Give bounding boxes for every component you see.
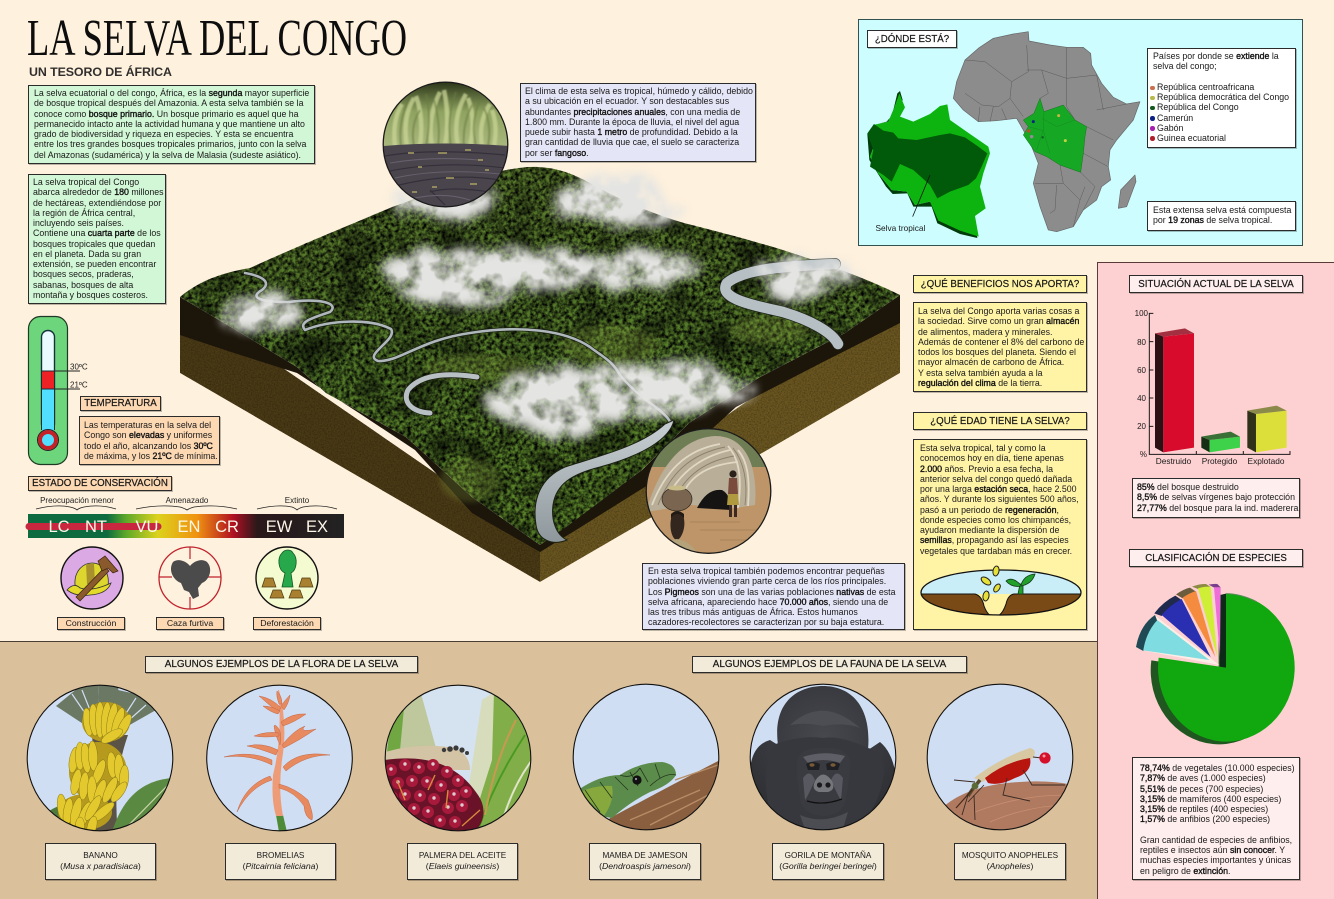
climate text: abundantes precipitaciones anuales, con una media de: [525, 106, 740, 116]
left soil side: [180, 297, 540, 582]
climate text: 1.800 mm. Durante la época de lluvia, el nivel del agua: [525, 117, 739, 127]
climate text: [520, 83, 756, 162]
map: enlarged rainforest region: [867, 91, 990, 238]
age panel with seed illustration: conocemos hoy en día, tiene apenas: [920, 453, 1064, 463]
caption: gorilla: GORILA DE MONTAÑA: [785, 851, 871, 860]
situation stats: [1132, 478, 1300, 518]
age panel with seed illustration: anterior selva del congo quedó dañada: [920, 474, 1072, 484]
species stats: Gran cantidad de especies de anfibios,: [1140, 835, 1292, 845]
extension text: bosques secos, praderas,: [33, 269, 134, 279]
bar chart: forest situation: 40: [1137, 394, 1147, 403]
caption: gorilla: [772, 843, 884, 880]
pygmy text: En esta selva tropical también podemos encontrar pequeñas: [648, 566, 885, 576]
river: widening lower reach: [535, 420, 674, 542]
caption: oil palm: PALMERA DEL ACEITE: [419, 851, 506, 860]
countries legend: Camerún: [1157, 112, 1193, 122]
heading: current situation: [1129, 275, 1303, 293]
age panel with seed illustration: [913, 439, 1087, 630]
conservation status bar: EW: [266, 518, 293, 536]
circle: muddy soil: [383, 82, 509, 210]
label: deforestation: Deforestación: [260, 618, 314, 628]
heading: temperature: [80, 396, 161, 411]
zones text: Esta extensa selva está compuesta: [1153, 205, 1291, 215]
benefits text: regulación del clima de la tierra.: [918, 378, 1042, 388]
countries legend: República centroafricana: [1157, 82, 1254, 92]
extension text: montaña y bosques costeros.: [33, 290, 148, 300]
heading: age: [913, 412, 1087, 430]
bar chart: forest situation: Protegido: [1202, 456, 1238, 466]
intro text: entre los tres grandes bosques tropicales primarios, junto con la selva: [34, 139, 306, 149]
climate text: El clima de esta selva es tropical, húmedo y cálido, debido: [525, 86, 753, 96]
age panel with seed illustration: por una larga estación seca, hace 2.500: [920, 484, 1077, 494]
climate text: por ser fangoso.: [525, 148, 589, 158]
countries legend: Guinea ecuatorial: [1157, 133, 1226, 143]
conservation scale labels: [36, 496, 337, 510]
age panel with seed illustration: Esta selva tropical, tal y como la: [920, 443, 1046, 453]
heading: temperature: TEMPERATURA: [84, 398, 157, 409]
caption: bromelia: (Pitcairnia feliciana): [243, 861, 318, 871]
species stats: 7,87% de aves (1.000 especies): [1140, 773, 1266, 783]
heading: current situation: SITUACIÓN ACTUAL DE LA SELVA: [1138, 279, 1294, 290]
age panel with seed illustration: vegetales que tardaban más en crecer.: [920, 546, 1072, 556]
bar chart: forest situation: 20: [1137, 422, 1147, 431]
caption: banana: (Musa x paradisiaca): [60, 861, 141, 871]
heading: where is it: ¿DÓNDE ESTÁ?: [875, 34, 949, 45]
caption: oil palm: (Elaeis guineensis): [426, 861, 499, 871]
heading: conservation: [28, 476, 172, 491]
heading: species classification: CLASIFICACIÓN DE ESPECIES: [1145, 553, 1287, 564]
flora: bromelia: [206, 685, 353, 832]
extension text: la región de África central,: [33, 208, 135, 218]
species stats: 3,15% de mamíferos (400 especies): [1140, 794, 1281, 804]
fauna: anopheles mosquito: [927, 684, 1074, 832]
benefits text: la sociedad. Sirve como un gran almacén: [918, 316, 1079, 326]
title: LA SELVA DEL CONGO: [27, 10, 407, 67]
lighter forest patches: [425, 316, 810, 502]
label: poaching: Caza furtiva: [167, 618, 213, 628]
extension text: abarca alrededor de 180 millones: [33, 187, 164, 197]
heading: fauna: [692, 656, 967, 673]
extension text: La selva tropical del Congo: [33, 177, 139, 187]
clouds: [222, 174, 858, 438]
conservation status bar: CR: [215, 518, 239, 536]
climate text: gran cantidad de lluvia que cae, el suelo se caracteriza: [525, 137, 739, 147]
panel: right status background: [1098, 262, 1334, 899]
countries legend: República democrática del Congo: [1157, 92, 1289, 102]
flora: oil palm: [385, 685, 532, 832]
countries legend: Países por donde se extiende la: [1153, 51, 1279, 61]
countries legend: [1147, 48, 1296, 148]
pygmy text: Los Pigmeos son una de las varias poblaciones nativas de esta: [648, 586, 895, 596]
benefits text: mayor almacén de carbono de África.: [918, 357, 1064, 367]
intro text: La selva ecuatorial o del congo, África, es la segunda mayor superficie: [34, 88, 309, 98]
benefits text: [913, 302, 1087, 392]
pygmy text: cazadores-recolectores se caracterizan por su baja estatura.: [648, 617, 884, 627]
river: main meander: [245, 264, 838, 542]
pygmy text: [642, 563, 905, 630]
river: upper right bend: [725, 264, 838, 344]
extension text: sabanas, bosques de alta: [33, 280, 133, 290]
heading: age: ¿QUÉ EDAD TIENE LA SELVA?: [930, 416, 1070, 427]
bar chart: forest situation: 80: [1137, 338, 1147, 347]
age panel with seed illustration: ayudaron mediante la dispersión de: [920, 525, 1059, 535]
intro text: [28, 85, 315, 164]
heading: flora: [145, 656, 418, 673]
heading: fauna: ALGUNOS EJEMPLOS DE LA FAUNA DE LA SELVA: [713, 659, 946, 670]
age panel with seed illustration: donde especies como los chimpancés,: [920, 515, 1071, 525]
conservation status bar: EN: [178, 518, 200, 536]
intro text: conoce como bosque primario. Un bosque primario es aquel que ha: [34, 108, 299, 118]
situation stats: 85% del bosque destruido: [1137, 482, 1239, 492]
forest surface: [180, 167, 900, 545]
caption: bromelia: BROMELIAS: [257, 851, 304, 860]
climate text: a su ubicación en el ecuador. Y son destacables sus: [525, 96, 729, 106]
bar chart: forest situation: 100: [1135, 309, 1149, 318]
caption: mosquito: (Anopheles): [987, 861, 1033, 871]
panel: map of Africa: [858, 20, 1302, 246]
pygmy text: poblaciones viviendo gran parte cerca de los ríos principales.: [648, 576, 886, 586]
species stats: 5,51% de peces (700 especies): [1140, 784, 1263, 794]
extension text: bosques tropicales que quedan: [33, 238, 155, 248]
extension text: incluyendo seis países.: [33, 218, 124, 228]
pygmy text: selva africana, apareciendo hace 70.000 años, siendo una de: [648, 597, 888, 607]
species stats: en peligro de extinción.: [1140, 866, 1230, 876]
icon: seeds in soil: [920, 566, 1082, 616]
dark topsoil band: [180, 295, 900, 552]
intro text: grado de biodiversidad y riqueza en especies. Y esta se encuentra: [34, 129, 293, 139]
icon: poaching: [159, 547, 221, 609]
intro text: de bosque tropical después del Amazonia. A esta selva también se la: [34, 98, 303, 108]
extension text: Contiene una cuarta parte de los: [33, 228, 161, 238]
thermometer: [28, 316, 88, 464]
icon: deforestation: [256, 547, 318, 609]
extension text: extensión, se pueden encontrar: [33, 259, 156, 269]
caption: banana: [45, 843, 156, 880]
heading: where is it: [867, 30, 957, 48]
heading: benefits: ¿QUÉ BENEFICIOS NOS APORTA?: [921, 279, 1079, 290]
conservation status bar: NT: [85, 518, 107, 536]
climate text: puede subir hasta 1 metro de profundidad. Debido a la: [525, 127, 738, 137]
zones text: [1147, 201, 1296, 231]
caption: gorilla: (Gorilla beringei beringei): [779, 861, 877, 871]
situation stats: 27,77% del bosque para la ind. maderera: [1137, 502, 1298, 512]
temperature text: todo el año, alcanzando los 30ºC: [84, 440, 213, 450]
temperature text: Las temperaturas en la selva del: [84, 420, 211, 430]
river: side loop: [406, 375, 477, 413]
pie chart: species classification: [1136, 584, 1295, 744]
species stats: muchas especies importantes y únicas: [1140, 855, 1291, 865]
subtitle: UN TESORO DE ÁFRICA: [29, 64, 172, 79]
extension text: de hectáreas, extendiéndose por: [33, 198, 161, 208]
conservation scale labels: Amenazado: [166, 496, 209, 505]
situation stats: 8,5% de selvas vírgenes bajo protección: [1137, 492, 1295, 502]
countries legend: Gabón: [1157, 123, 1183, 133]
caption: bromelia: [225, 843, 336, 880]
heading: benefits: [913, 275, 1087, 293]
benefits text: La selva del Congo aporta varias cosas a: [918, 306, 1079, 316]
benefits text: Además de contener el 8% del carbono de: [918, 337, 1084, 347]
caption: mamba: [589, 843, 701, 880]
extension text: [28, 174, 166, 304]
age panel with seed illustration: 2.000 años. Previo a esa fecha, la: [920, 464, 1053, 474]
isometric forest block: [180, 167, 900, 582]
intro text: permanecido intacto ante la actividad humana y que mantiene un alto: [34, 119, 305, 129]
bar chart: forest situation: Explotado: [1248, 456, 1285, 466]
conservation scale labels: Preocupación menor: [40, 496, 114, 505]
label: deforestation: [253, 617, 321, 630]
heading: conservation: ESTADO DE CONSERVACIÓN: [32, 478, 168, 489]
conservation status bar: [28, 514, 344, 538]
bar chart: forest situation: 60: [1137, 366, 1147, 375]
caption: banana: BANANO: [83, 851, 118, 860]
benefits text: Y esta selva también ayuda a la: [918, 368, 1043, 378]
species stats: reptiles e insectos aún sin conocer. Y: [1140, 845, 1285, 855]
temperature text: de máxima, y los 21ºC de mínima.: [84, 451, 218, 461]
flora: banana: [27, 684, 173, 837]
age panel with seed illustration: semillas, propagando así las especies: [920, 535, 1069, 545]
thermometer: 30ºC: [70, 362, 88, 372]
conservation status bar: LC: [48, 518, 70, 536]
caption: mamba: (Dendroaspis jamesoni): [599, 861, 691, 871]
conservation status bar: EX: [306, 518, 328, 536]
heading: species classification: [1129, 549, 1303, 567]
bar chart: forest situation: Destruido: [1156, 456, 1192, 466]
label: construction: [57, 617, 125, 630]
benefits text: de alimentos, madera y minerales.: [918, 326, 1052, 336]
label: poaching: [156, 617, 224, 630]
heading: flora: ALGUNOS EJEMPLOS DE LA FLORA DE LA SELVA: [165, 659, 398, 670]
extension text: en el planeta. Dada su gran: [33, 249, 141, 259]
caption: oil palm: [407, 843, 518, 880]
right soil side: [540, 295, 900, 582]
bar chart: forest situation: %: [1140, 450, 1147, 459]
species stats: 3,15% de reptiles (400 especies): [1140, 804, 1268, 814]
map: Africa continent: [953, 32, 1140, 232]
species stats: [1132, 757, 1300, 880]
fauna: Jameson's mamba: [573, 684, 720, 832]
label: construction: Construcción: [66, 618, 116, 628]
countries legend: República del Congo: [1157, 102, 1239, 112]
caption: mosquito: [954, 843, 1066, 880]
age panel with seed illustration: pasó a un periodo de regeneración,: [920, 504, 1059, 514]
countries legend: selva del congo;: [1153, 61, 1217, 71]
circle: pygmy village: [646, 429, 772, 554]
zones text: por 19 zonas de selva tropical.: [1153, 215, 1272, 225]
temperature text: Congo son elevadas y uniformes: [84, 430, 212, 440]
panel: flora and fauna background: [0, 642, 1097, 899]
species stats: 78,74% de vegetales (10.000 especies): [1140, 763, 1295, 773]
temperature text: [79, 416, 220, 465]
map: Congo basin highlighted: [1023, 98, 1087, 172]
caption: mamba: MAMBA DE JAMESON: [602, 851, 688, 860]
conservation status bar: VU: [136, 518, 158, 536]
icon: construction: [61, 547, 123, 609]
fauna: mountain gorilla: [750, 684, 897, 832]
caption: mosquito: MOSQUITO ANOPHELES: [962, 851, 1058, 860]
pygmy text: las tres tribus más antiguas de África. Estos humanos: [648, 607, 858, 617]
conservation scale labels: Extinto: [285, 496, 310, 505]
benefits text: todos los bosques del planeta. Siendo el: [918, 347, 1076, 357]
bar chart: forest situation: [1135, 309, 1290, 466]
panel: map of Africa: Selva tropical: [876, 223, 925, 233]
age panel with seed illustration: años. Y durante los siguientes 500 años,: [920, 494, 1079, 504]
intro text: del Amazonas (sudamérica) y la selva de Malasia (sudeste asiático).: [34, 150, 301, 160]
species stats: 1,57% de anfibios (200 especies): [1140, 814, 1270, 824]
thermometer: 21ºC: [70, 380, 88, 390]
